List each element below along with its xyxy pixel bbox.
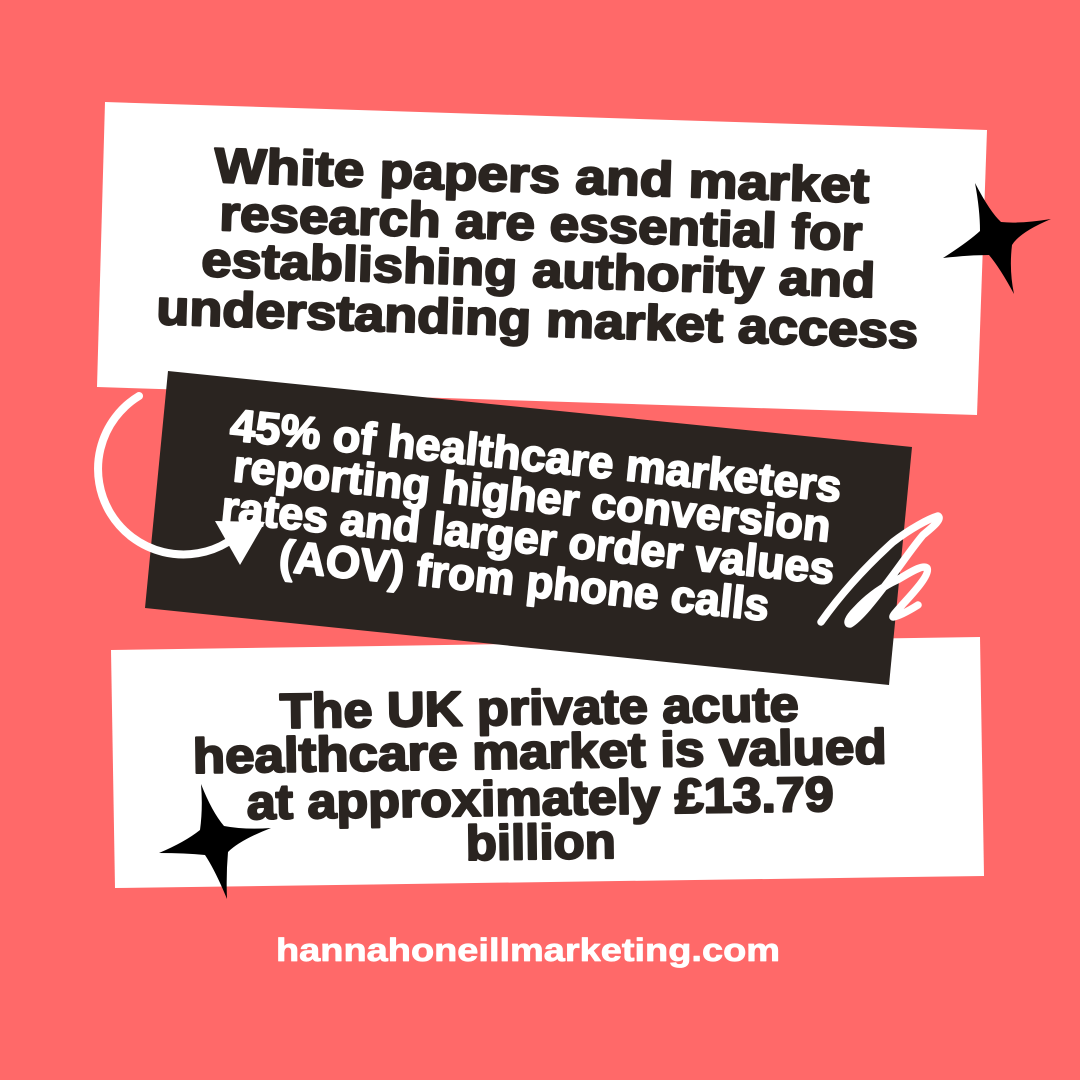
icon: star bottom left (159, 784, 271, 899)
text: 45% statistic: (AOV) from phone calls (277, 530, 772, 631)
panel: white papers (97, 102, 987, 415)
icon: white scribble (821, 516, 939, 624)
heading: white papers text: White papers and market (214, 139, 870, 214)
heading: UK market text (192, 678, 887, 871)
text: 45% statistic: 45% of healthcare marketers (228, 399, 844, 512)
heading: UK market text: healthcare market is valued (192, 720, 887, 784)
heading: white papers text: establishing authority and (201, 233, 876, 308)
heading: UK market text: The UK private acute (279, 678, 799, 739)
text: 45% statistic: rates and larger order values (219, 481, 837, 594)
text: 45% statistic: reporting higher conversion (231, 440, 833, 552)
heading: white papers text: research are essential for (219, 187, 863, 261)
heading: UK market text: at approximately £13.79 (246, 768, 834, 830)
heading: white papers text: understanding market access (156, 281, 919, 359)
text: 45% statistic (219, 399, 844, 631)
panel: UK market value (111, 637, 984, 888)
icon: curved arrow (98, 396, 265, 565)
heading: white papers text (156, 139, 919, 359)
footer: website url: hannahoneillmarketing.com (276, 932, 780, 968)
icon: star top right (943, 183, 1051, 294)
panel: healthcare marketers statistic (145, 371, 912, 685)
heading: UK market text: billion (465, 815, 616, 871)
